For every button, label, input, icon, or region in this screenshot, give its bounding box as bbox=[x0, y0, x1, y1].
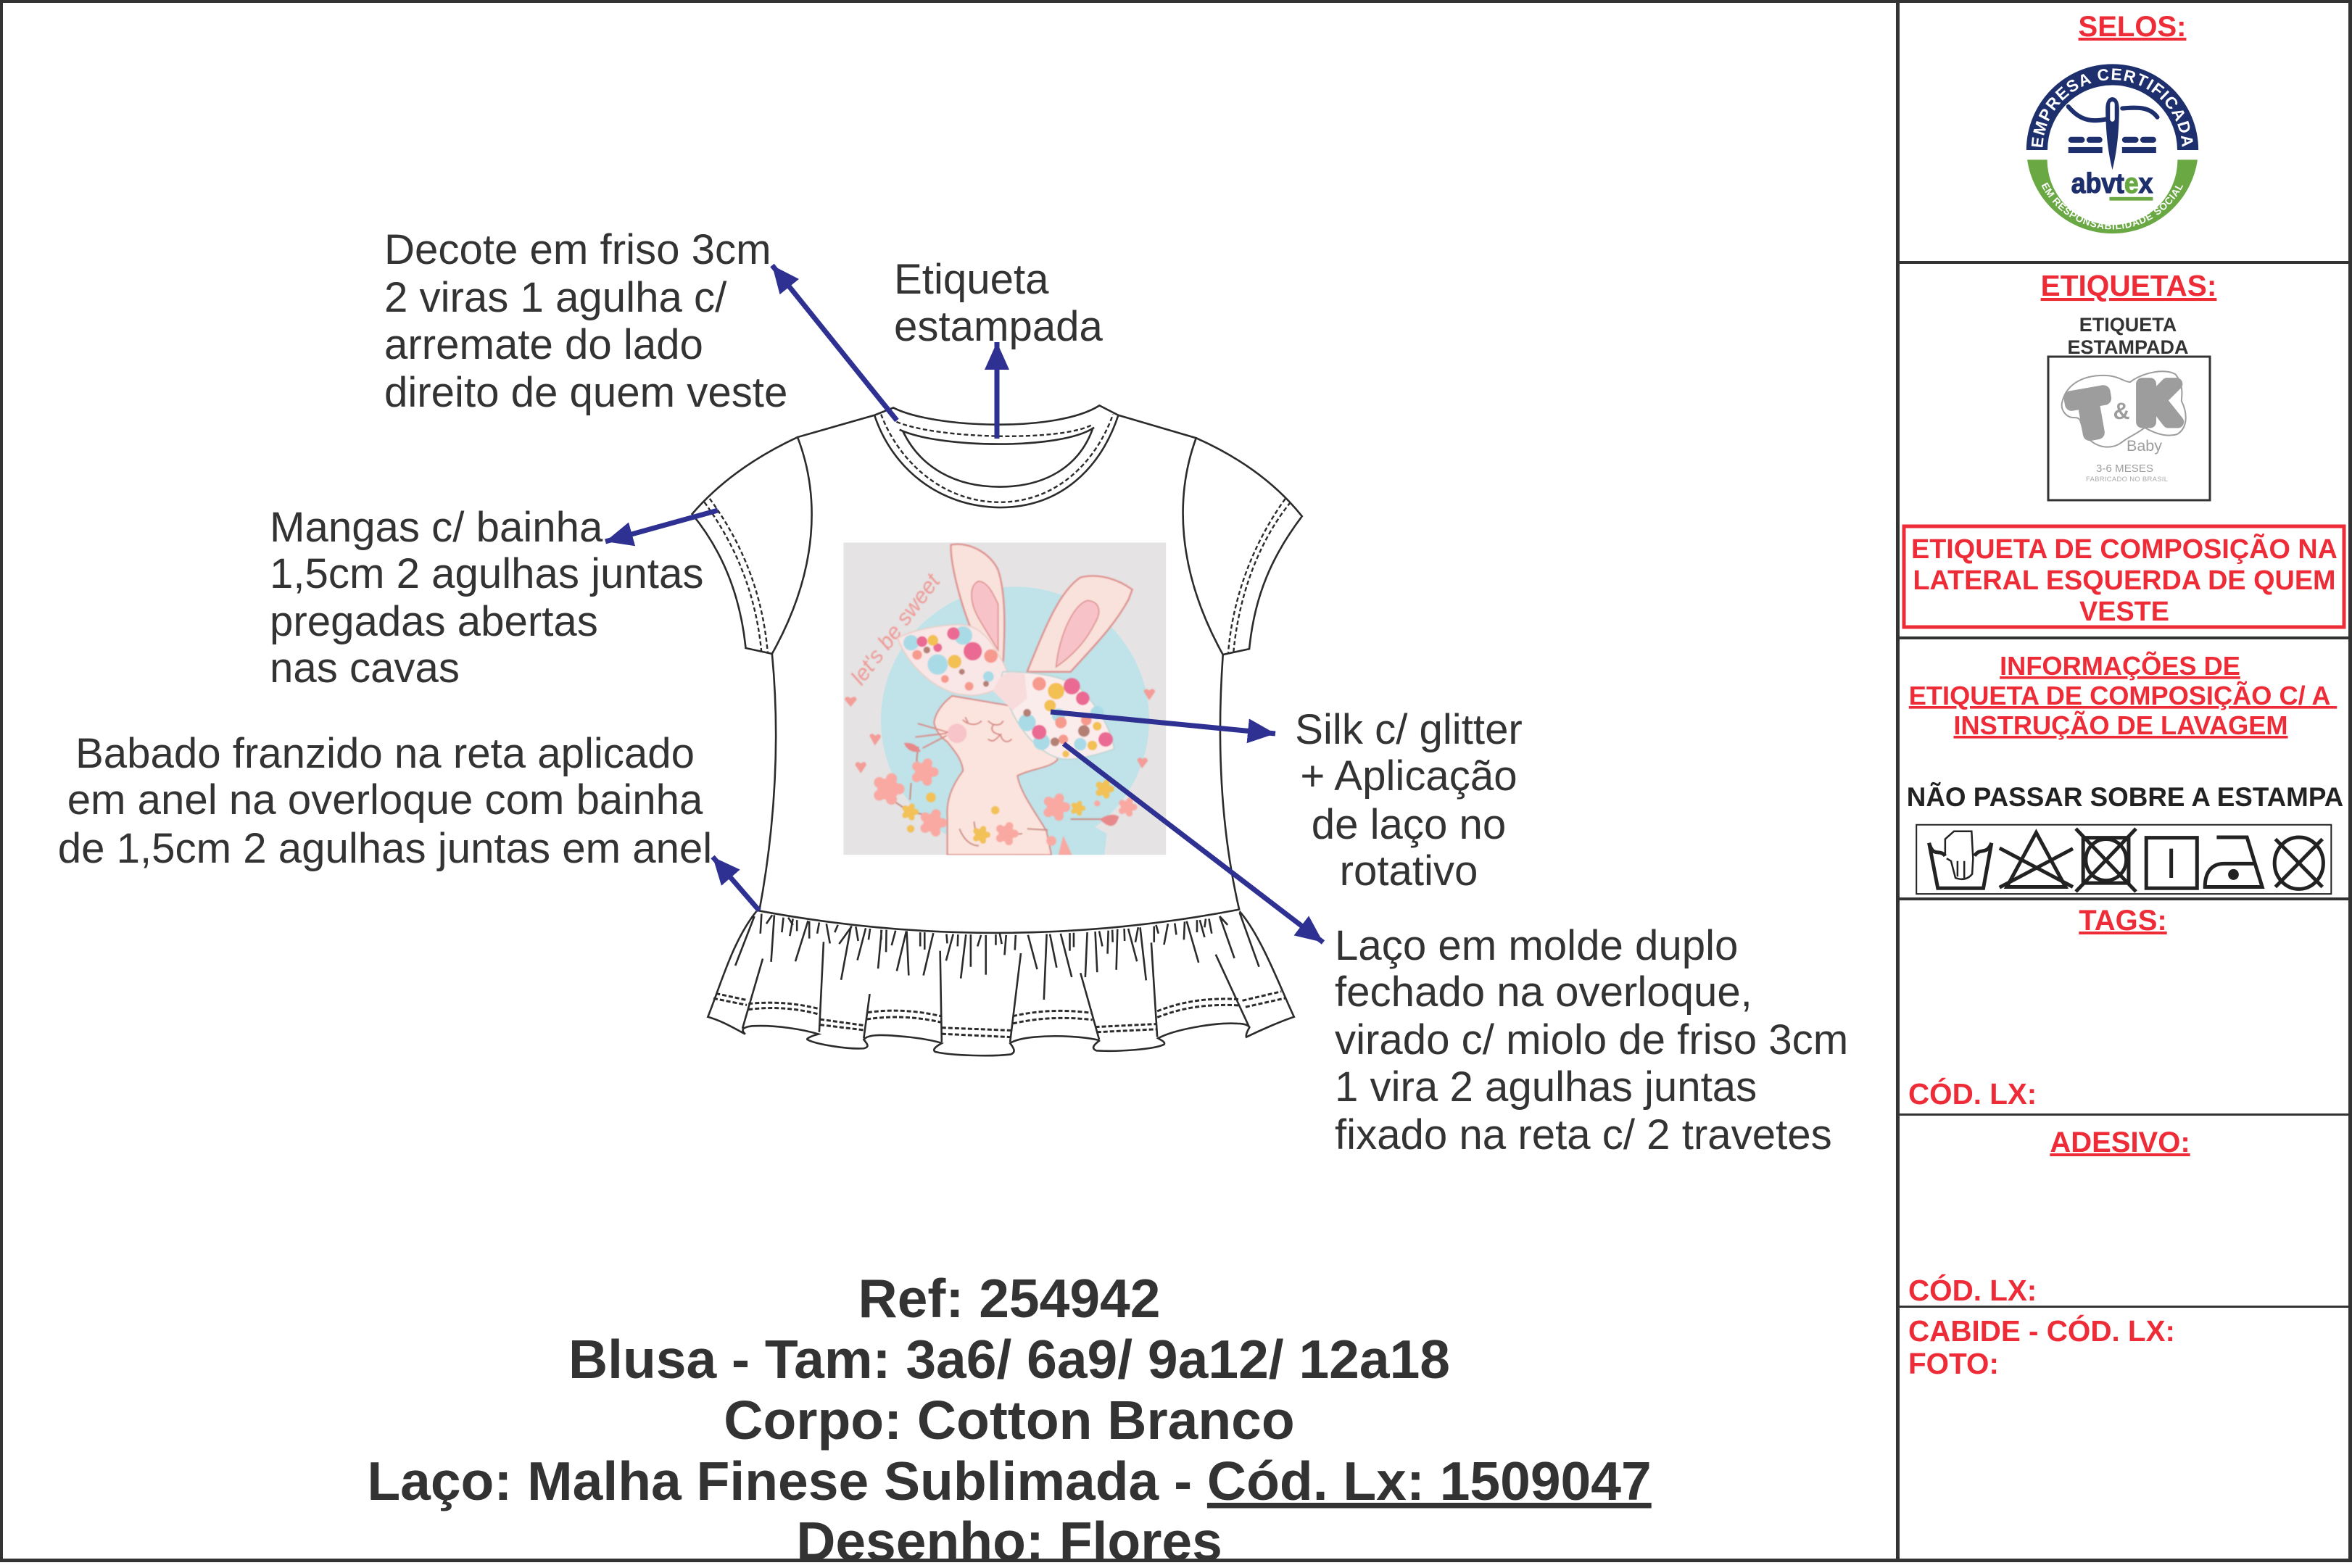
callout: silk with glitter: de laço no bbox=[1312, 801, 1506, 848]
callout: sleeves: Mangas c/ bainha bbox=[270, 504, 603, 551]
arrow: ruffle bbox=[713, 857, 759, 910]
callout: sleeves: pregadas abertas bbox=[270, 598, 598, 645]
callout: bow: virado c/ miolo de friso 3cm bbox=[1335, 1016, 1848, 1063]
shirt ruffle bbox=[708, 911, 1294, 1055]
shirt body and sleeves bbox=[692, 405, 1302, 933]
arrow: bow bbox=[1064, 744, 1323, 942]
heading: composition information: INSTRUÇÃO DE LAVAGEM bbox=[1953, 710, 2288, 740]
callout: printed label: Etiqueta bbox=[894, 256, 1049, 303]
panel: labels bbox=[1904, 269, 2344, 627]
photo label: FOTO: bbox=[1908, 1347, 1999, 1380]
panel: care information bbox=[1907, 650, 2343, 894]
arrow: silk with glitter bbox=[1051, 712, 1275, 734]
printed label sample: FABRICADO NO BRASIL bbox=[2086, 476, 2168, 484]
product specification block: Blusa - Tam: 3a6/ 6a9/ 9a12/ 12a18 bbox=[568, 1329, 1450, 1390]
callout: sleeves: nas cavas bbox=[270, 644, 460, 692]
printed label caption: ESTAMPADA bbox=[2068, 336, 2188, 358]
code label: CÓD. LX: bbox=[1908, 1274, 2037, 1307]
callout: silk with glitter: Silk c/ glitter bbox=[1295, 706, 1523, 753]
callout: bow: Laço em molde duplo bbox=[1335, 922, 1738, 969]
bunny print with fabric bow bbox=[843, 542, 1166, 855]
callout: ruffle: em anel na overloque com bainha bbox=[67, 776, 703, 824]
icon: abvtex seal: EM RESPONSABILIDADE SOCIAL bbox=[2042, 183, 2184, 229]
care symbols bbox=[1916, 825, 2331, 894]
callout: neckline: arremate do lado bbox=[384, 321, 703, 368]
printed label sample: K bbox=[2139, 373, 2179, 434]
icon: hand wash bbox=[1929, 831, 1992, 888]
bunny head and body bbox=[934, 696, 1057, 855]
fabric bow bbox=[898, 625, 1008, 695]
heading: etiquetas: ETIQUETAS: bbox=[2041, 269, 2216, 302]
callout: neckline: direito de quem veste bbox=[384, 369, 787, 416]
printed label sample: Baby bbox=[2127, 437, 2162, 455]
panel: hanger bbox=[1908, 1314, 2175, 1380]
panel: seals bbox=[2026, 11, 2198, 233]
icon: iron low bbox=[2205, 837, 2262, 887]
callout: composition label position: LATERAL ESQUERDA DE QUEM bbox=[1913, 565, 2336, 596]
callout: printed label: estampada bbox=[894, 303, 1103, 350]
shirt technical drawing bbox=[692, 405, 1302, 1055]
printed label sample: T bbox=[2068, 380, 2113, 448]
heading: adesivo: ADESIVO: bbox=[2050, 1127, 2190, 1158]
icon: abvtex seal bbox=[2026, 64, 2198, 233]
callout: bow: fechado na overloque, bbox=[1335, 968, 1752, 1016]
callout: composition label position: ETIQUETA DE COMPOSIÇÃO NA bbox=[1911, 534, 2337, 565]
callout: sleeves: 1,5cm 2 agulhas juntas bbox=[270, 550, 703, 597]
callout: ruffle: de 1,5cm 2 agulhas juntas em anel bbox=[58, 825, 712, 872]
lettering: let's be sweet bbox=[846, 568, 945, 689]
heading: composition information: ETIQUETA DE COMPOSIÇÃO C/ A bbox=[1909, 680, 2337, 710]
printed label caption: ETIQUETA bbox=[2079, 314, 2177, 336]
heading: selos: SELOS: bbox=[2079, 11, 2186, 43]
printed label sample: 3-6 MESES bbox=[2096, 462, 2153, 475]
callout: neckline: 2 viras 1 agulha c/ bbox=[384, 274, 727, 321]
arrows bbox=[605, 265, 1323, 942]
arrow: printed label bbox=[995, 342, 999, 439]
code label: CÓD. LX: bbox=[1908, 1077, 2037, 1111]
product specification block: Laço: Malha Finese Sublimada - Cód. Lx: 1509047 bbox=[367, 1451, 1652, 1511]
arrow: neckline bbox=[772, 265, 897, 420]
icon: line dry bbox=[2146, 838, 2197, 888]
icon: no dry clean bbox=[2274, 837, 2323, 889]
printed label sample: & bbox=[2113, 398, 2130, 424]
callout: bow: fixado na reta c/ 2 travetes bbox=[1335, 1111, 1832, 1158]
heading: composition information: INFORMAÇÕES DE bbox=[2000, 650, 2240, 681]
panel: sticker bbox=[1908, 1127, 2190, 1307]
callout: bow: 1 vira 2 agulhas juntas bbox=[1335, 1063, 1757, 1111]
warning text: NÃO PASSAR SOBRE A ESTAMPA bbox=[1907, 781, 2343, 812]
icon: no bleach bbox=[2000, 833, 2073, 887]
panel: tags bbox=[1908, 905, 2167, 1111]
icon: no tumble dry bbox=[2076, 829, 2136, 892]
callout: silk with glitter: rotativo bbox=[1340, 847, 1478, 895]
icon: abvtex seal: EMPRESA CERTIFICADA bbox=[2032, 68, 2193, 148]
product specification block bbox=[367, 1268, 1652, 1568]
callout: composition label position: VESTE bbox=[2079, 597, 2169, 627]
callout: ruffle: Babado franzido na reta aplicado bbox=[75, 730, 695, 777]
callout: composition label position bbox=[1904, 526, 2344, 627]
hearts bbox=[845, 689, 1155, 773]
heading: tags: TAGS: bbox=[2079, 905, 2167, 937]
arrow: sleeves bbox=[605, 510, 718, 542]
icon: abvtex seal: abvtex bbox=[2071, 168, 2153, 199]
bunny ears bbox=[951, 544, 1004, 665]
printed label sample bbox=[2048, 357, 2210, 500]
floral wreath bbox=[892, 747, 1104, 846]
hanger code: CABIDE - CÓD. LX: bbox=[1908, 1314, 2175, 1348]
callout: neckline: Decote em friso 3cm bbox=[384, 226, 771, 273]
product specification block: Ref: 254942 bbox=[858, 1268, 1160, 1329]
heading: composition information bbox=[1909, 650, 2337, 740]
product specification block: Corpo: Cotton Branco bbox=[724, 1390, 1295, 1451]
callout: silk with glitter: + Aplicação bbox=[1300, 752, 1517, 800]
